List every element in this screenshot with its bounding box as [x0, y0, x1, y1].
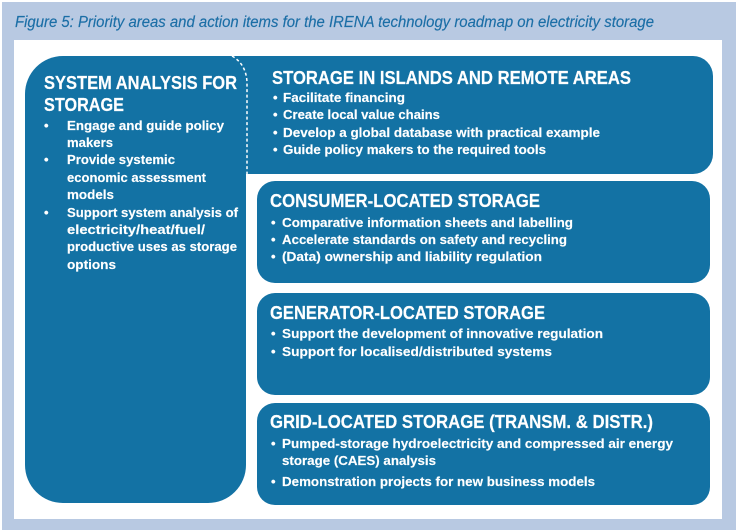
- list: system analysis: makers: [67, 135, 113, 150]
- list: grid: •: [271, 436, 276, 451]
- list: islands: Facilitate financing: [283, 90, 405, 105]
- list: generator: Support the development of innovative regulation: [282, 326, 603, 341]
- list: islands: Develop a global database with practical example: [283, 125, 600, 140]
- list: islands: Create local value chains: [283, 107, 440, 122]
- panel: grid-located storage: [257, 403, 710, 505]
- list: grid: [271, 436, 674, 489]
- panel: system analysis for storage: STORAGE: [44, 95, 124, 115]
- list: system analysis: •: [44, 152, 49, 167]
- list: consumer: [271, 215, 573, 264]
- panel: consumer-located storage: [257, 181, 710, 283]
- heading: system analysis: SYSTEM ANALYSIS FOR: [44, 73, 237, 93]
- panel: system analysis for storage: [25, 56, 247, 503]
- list: system analysis: economic assessment: [67, 170, 207, 185]
- list: islands: Guide policy makers to the required tools: [283, 142, 546, 157]
- heading: generator: GENERATOR-LOCATED STORAGE: [270, 303, 545, 323]
- list: consumer: Accelerate standards on safety and recycling: [282, 232, 567, 247]
- heading: islands: STORAGE IN ISLANDS AND REMOTE AREAS: [272, 68, 631, 88]
- list: system analysis: productive uses as storage: [67, 239, 237, 254]
- list: system analysis: Engage and guide policy: [67, 118, 225, 133]
- list: grid: storage (CAES) analysis: [282, 453, 436, 468]
- title: Figure 5: Priority areas and action items for the IRENA technology roadmap on electricity storage: [15, 14, 654, 31]
- list: islands: •: [273, 142, 278, 157]
- list: islands: •: [273, 90, 278, 105]
- list: system analysis: •: [44, 118, 49, 133]
- list: generator: •: [271, 326, 276, 341]
- list: system analysis: [44, 118, 239, 272]
- list: consumer: (Data) ownership and liability regulation: [282, 249, 542, 264]
- list: system analysis: Support system analysis of: [67, 205, 239, 220]
- list: system analysis: •: [44, 205, 49, 220]
- list: islands: •: [273, 125, 278, 140]
- list: islands: •: [273, 107, 278, 122]
- list: islands: [273, 90, 600, 157]
- heading: consumer: CONSUMER-LOCATED STORAGE: [270, 191, 540, 211]
- list: system analysis: models: [67, 187, 114, 202]
- list: grid: Pumped-storage hydroelectricity and compressed air energy: [282, 436, 674, 451]
- list: generator: Support for localised/distributed systems: [282, 344, 552, 359]
- heading: grid: GRID-LOCATED STORAGE (TRANSM. & DISTR.): [270, 412, 653, 432]
- panel: generator-located storage: [257, 293, 710, 395]
- list: grid: •: [271, 474, 276, 489]
- dashed divider: [232, 56, 247, 174]
- list: consumer: •: [271, 249, 276, 264]
- list: generator: [271, 326, 603, 359]
- list: generator: •: [271, 344, 276, 359]
- list: system analysis: options: [67, 257, 116, 272]
- list: consumer: •: [271, 215, 276, 230]
- list: system analysis: Provide systemic: [67, 152, 175, 167]
- list: consumer: •: [271, 232, 276, 247]
- list: consumer: Comparative information sheets and labelling: [282, 215, 573, 230]
- list: system analysis: electricity/heat/fuel/: [67, 222, 205, 237]
- list: grid: Demonstration projects for new business models: [282, 474, 595, 489]
- panel: storage in islands and remote areas: [190, 56, 713, 174]
